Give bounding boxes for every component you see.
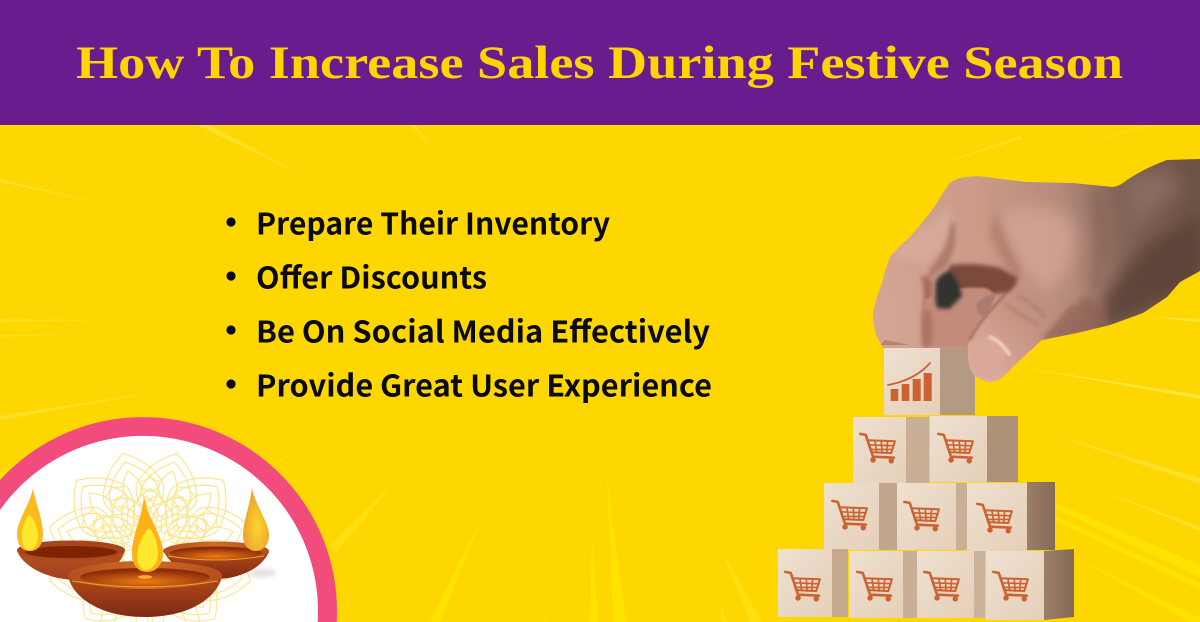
row 3 blocks (824, 482, 1055, 551)
thumb (968, 270, 1075, 382)
thumbnail (970, 336, 1006, 378)
icon: cart (857, 572, 892, 602)
row 4 blocks (778, 549, 1074, 620)
left diya (17, 488, 125, 580)
pink ring (0, 417, 337, 622)
right diya (163, 488, 276, 579)
thumb crease (970, 283, 1017, 340)
diya shadow (248, 568, 276, 578)
white disc (0, 436, 318, 622)
front diya (68, 496, 222, 617)
icon: cart (904, 502, 939, 532)
bullet item 2: Offer Discounts (256, 254, 487, 298)
hand (873, 159, 1200, 350)
icon: cart (785, 572, 820, 602)
hand shading (880, 170, 1200, 348)
left flame (17, 488, 43, 551)
wooden block pyramid (778, 348, 1074, 620)
row 2 blocks (853, 416, 1018, 483)
top block: growth chart (884, 348, 975, 415)
title: How To Increase Sales During Festive Season (76, 37, 1123, 89)
icon: bar chart with growth curve (888, 363, 932, 401)
bullet item 4: Provide Great User Experience (256, 362, 712, 406)
header banner (0, 0, 1200, 125)
icon: cart (832, 501, 867, 531)
right flame (243, 488, 269, 551)
bullet list (226, 200, 712, 406)
diya illustration in pink ring (0, 417, 337, 622)
mandala (42, 446, 258, 622)
background light rays (0, 125, 1200, 622)
bullet item 1: Prepare Their Inventory (256, 200, 610, 244)
front flame (132, 496, 163, 572)
bullet item 3: Be On Social Media Effectively (256, 308, 710, 352)
icon: cart (993, 572, 1028, 602)
icon: cart (924, 572, 959, 602)
icon: cart (977, 504, 1012, 534)
icon: cart (938, 434, 973, 464)
icon: cart (860, 434, 895, 464)
